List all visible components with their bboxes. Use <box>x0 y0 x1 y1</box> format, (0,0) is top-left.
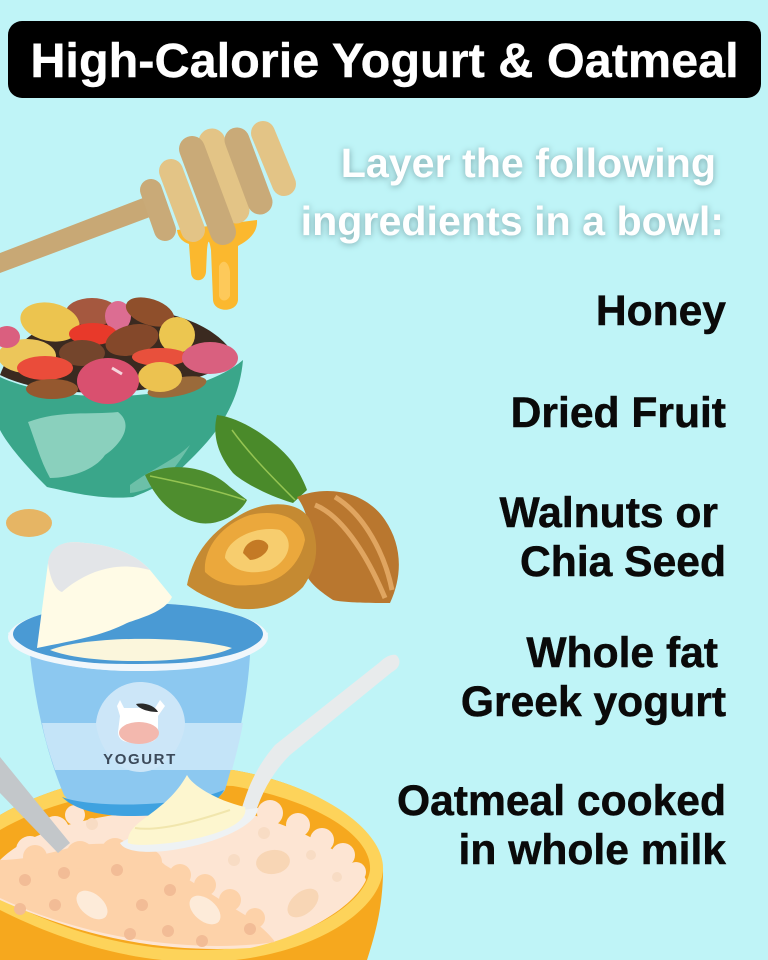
ingredient: oatmeal: Oatmeal cooked <box>397 777 726 825</box>
ingredient: oatmeal <box>397 777 726 874</box>
icon: walnuts and leaves <box>145 415 399 609</box>
ingredient: whole fat greek yogurt: Greek yogurt <box>461 678 726 726</box>
subheading: Layer the following <box>341 140 716 186</box>
subheading <box>299 140 724 248</box>
ingredient: walnuts or chia seed <box>499 489 726 586</box>
icon: small dried fruit piece <box>6 509 52 537</box>
icon: spoon with yogurt <box>120 655 399 852</box>
icon: yogurt cup <box>8 542 268 816</box>
ingredient: walnuts or chia seed: Walnuts or <box>500 489 718 537</box>
ingredient: whole fat greek yogurt <box>461 629 726 726</box>
ingredient: oatmeal: in whole milk <box>459 826 726 874</box>
title bar: High-Calorie Yogurt & Oatmeal <box>30 34 739 88</box>
title bar <box>8 21 761 98</box>
ingredient: honey: Honey <box>596 287 726 335</box>
oats: darker mass <box>0 838 275 946</box>
ingredient: whole fat greek yogurt: Whole fat <box>526 629 718 677</box>
ingredient: dried fruit: Dried Fruit <box>511 389 726 437</box>
icon: oatmeal bowl <box>0 769 383 960</box>
icon: left spoon handle <box>0 757 70 853</box>
icon: bowl of dried fruit <box>0 292 243 498</box>
icon: yogurt cup: YOGURT <box>103 751 177 768</box>
subheading: ingredients in a bowl: <box>301 198 724 244</box>
ingredient: walnuts or chia seed: Chia Seed <box>520 538 726 586</box>
oats: light mass <box>0 800 366 949</box>
icon: honey dipper <box>0 133 284 310</box>
